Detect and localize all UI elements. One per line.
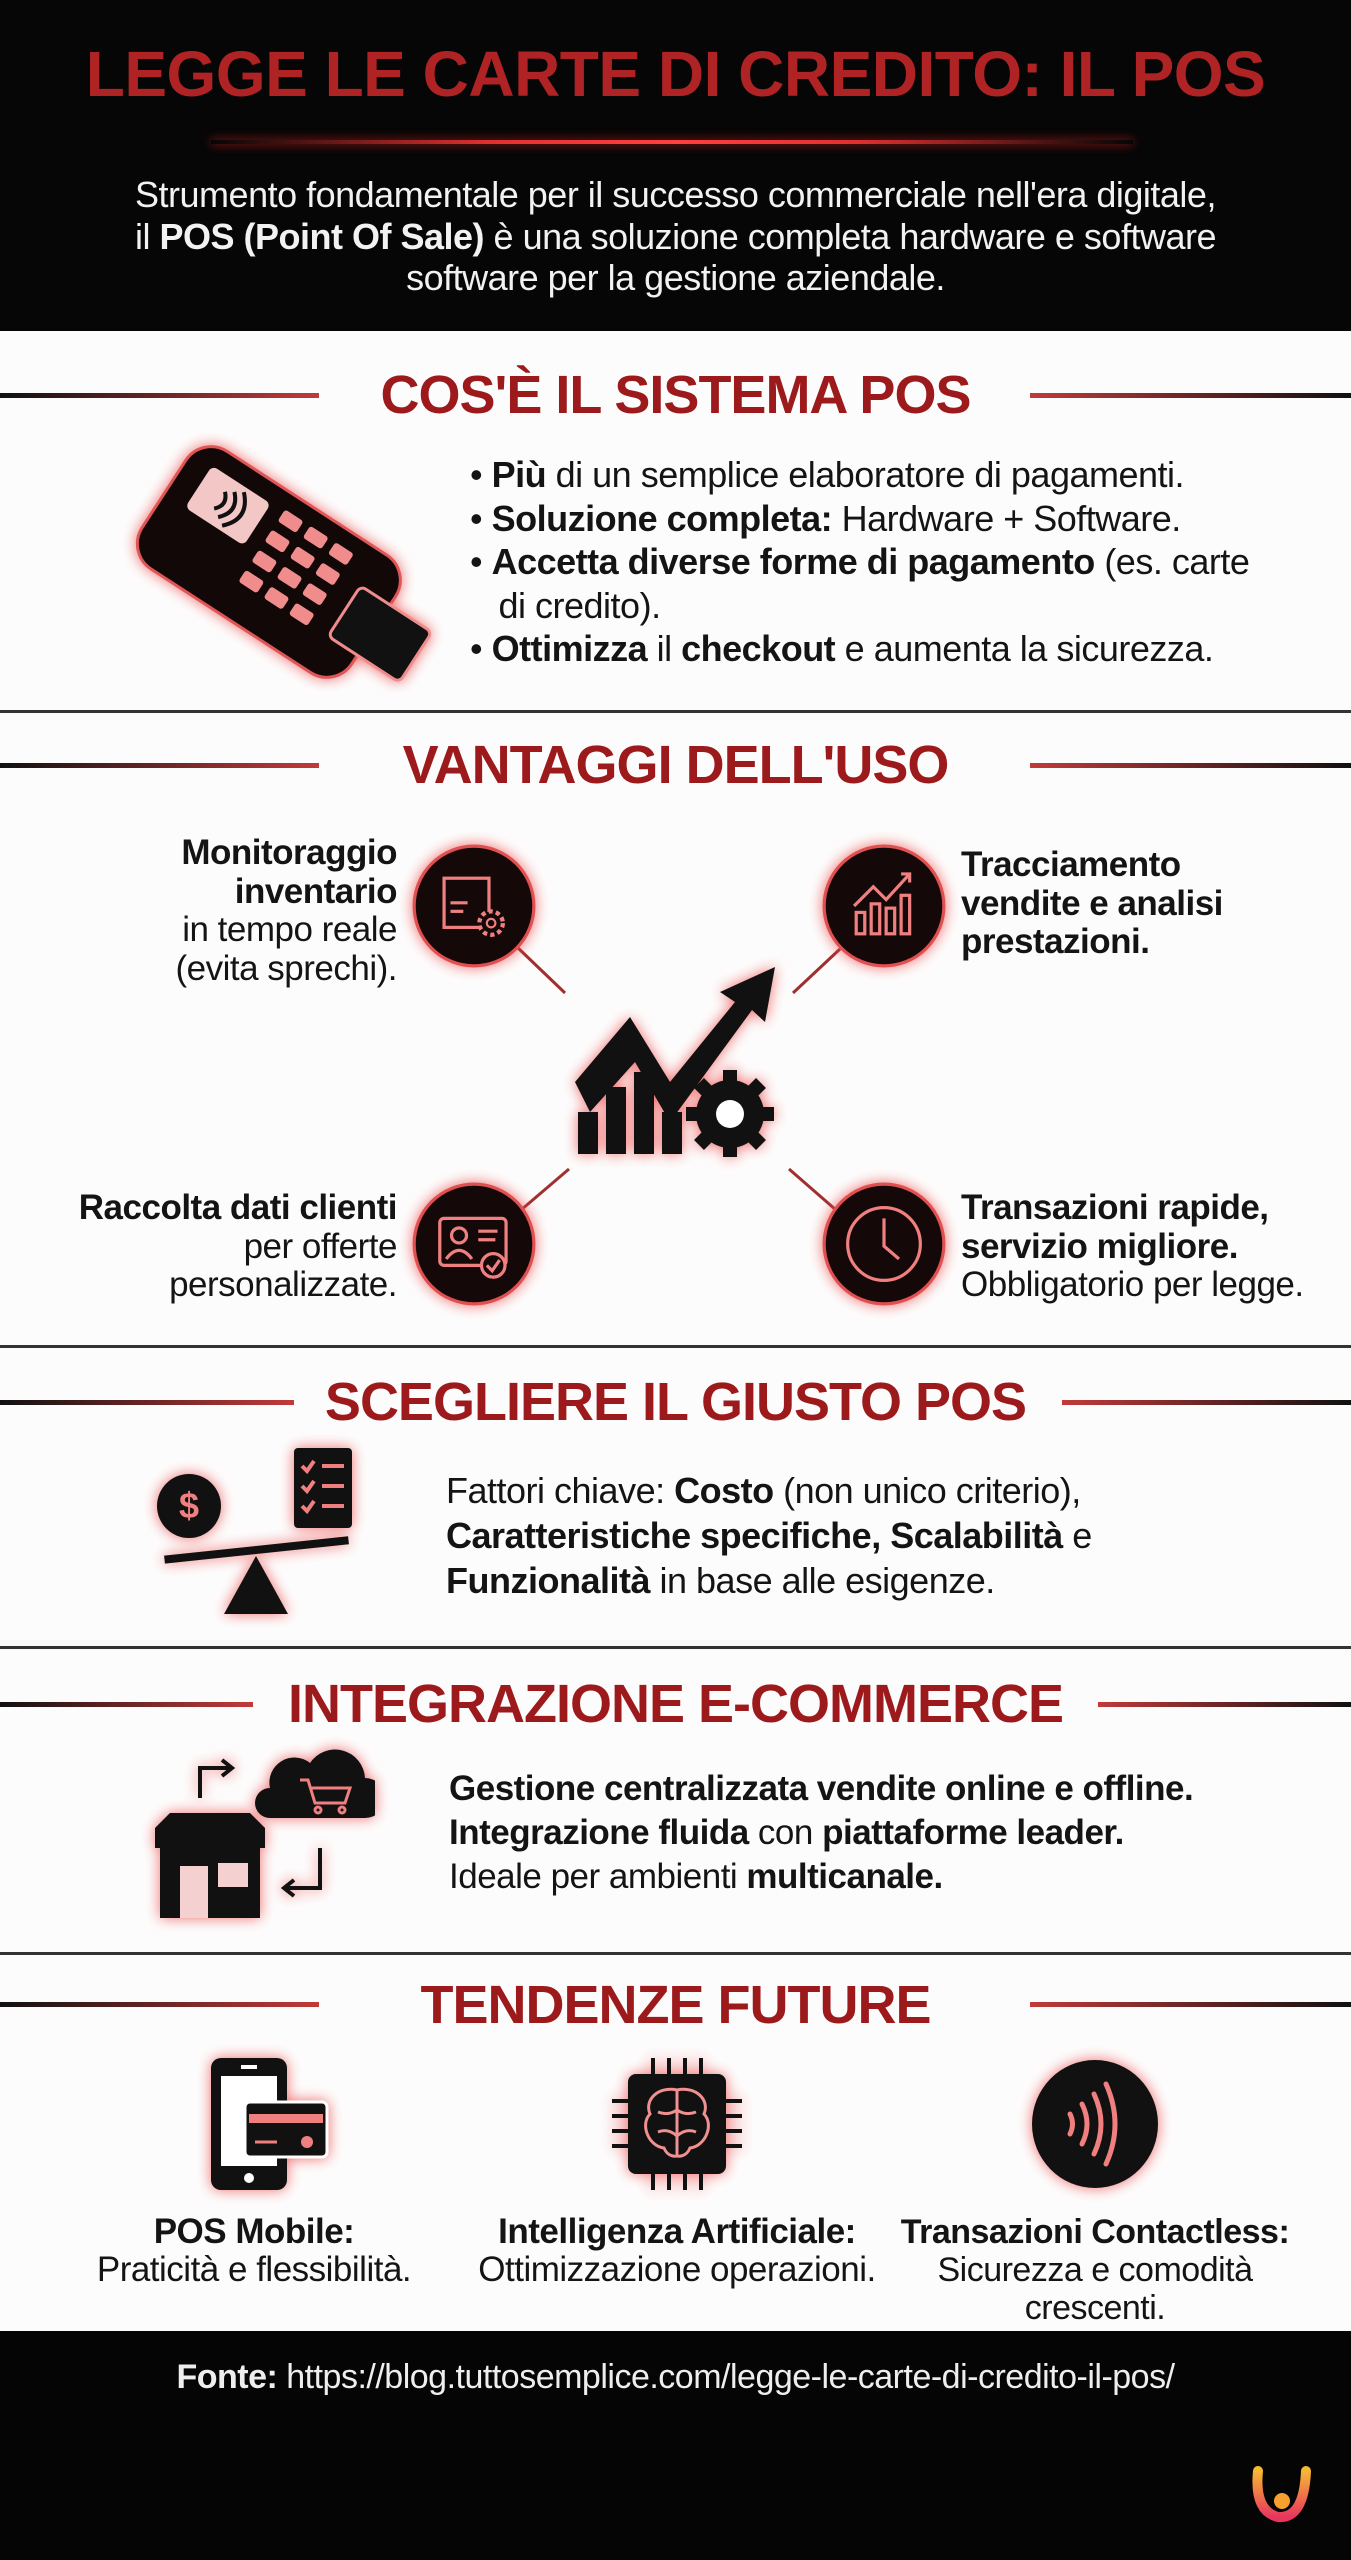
- label: transazioni contactless: Transazioni Contactless:: [901, 2213, 1289, 2251]
- text: ecommerce integration: [449, 1769, 1193, 1896]
- icon: balance scale: [148, 1438, 362, 1624]
- text: monitoraggio inventario: in tempo reale: [182, 910, 397, 949]
- text: transazioni rapide: Transazioni rapide,: [961, 1188, 1269, 1227]
- label: pos mobile: Praticità e flessibilità.: [97, 2250, 411, 2289]
- bullet list: pos definition: [470, 454, 1249, 669]
- text: ecommerce integration: Ideale per ambienti multicanale.: [449, 1857, 943, 1896]
- text: tracciamento vendite: vendite e analisi: [961, 884, 1223, 923]
- section heading: tendenze future: TENDENZE FUTURE: [420, 1975, 930, 2035]
- text: transazioni rapide: servizio migliore.: [961, 1227, 1238, 1266]
- logo: [1252, 2466, 1311, 2522]
- text: raccolta dati clienti: personalizzate.: [169, 1265, 397, 1304]
- icon: POS terminal: [126, 436, 440, 690]
- label: transazioni contactless: Sicurezza e comodità: [937, 2251, 1253, 2289]
- subtitle: il POS (Point Of Sale) è una soluzione completa hardware e software: [135, 216, 1216, 256]
- source text: Fonte: https://blog.tuttosemplice.com/legge-le-carte-di-credito-il-pos/: [176, 2358, 1175, 2396]
- bullet list: pos definition: • Più di un semplice elaboratore di pagamenti.: [470, 454, 1184, 495]
- text: transazioni rapide: [961, 1188, 1304, 1304]
- text: monitoraggio inventario: (evita sprechi).: [175, 949, 397, 988]
- text: monitoraggio inventario: Monitoraggio: [181, 833, 397, 872]
- icon: central growth chart with gear: [568, 961, 783, 1166]
- icon: AI chip: [607, 2053, 747, 2195]
- text: tracciamento vendite: [961, 845, 1223, 961]
- label: intelligenza artificiale: [478, 2212, 876, 2289]
- header panel: [0, 0, 1351, 331]
- bullet list: pos definition: • Soluzione completa: Hardware + Software.: [470, 498, 1181, 539]
- trend: contactless: [901, 2050, 1289, 2327]
- connector lines: [518, 947, 841, 1210]
- icon: inventory circle: [402, 834, 546, 978]
- text: tracciamento vendite: prestazioni.: [961, 922, 1149, 961]
- label: transazioni contactless: [901, 2213, 1289, 2327]
- subtitle: software per la gestione aziendale.: [406, 257, 945, 298]
- section heading: scegliere il giusto pos: SCEGLIERE IL GIUSTO POS: [325, 1372, 1026, 1432]
- text: raccolta dati clienti: Raccolta dati clienti: [79, 1188, 397, 1227]
- section heading: vantaggi: VANTAGGI DELL'USO: [403, 735, 948, 795]
- label: pos mobile: POS Mobile:: [154, 2212, 354, 2251]
- text: fattori chiave: Caratteristiche specifiche, Scalabilità e: [446, 1515, 1092, 1556]
- subtitle: [135, 174, 1216, 298]
- section heading: cos'è il sistema pos: COS'È IL SISTEMA POS: [381, 365, 970, 425]
- icon: customer data circle: [402, 1172, 546, 1316]
- icon: store and cloud cart: [145, 1740, 386, 1928]
- label: pos mobile: [97, 2212, 411, 2289]
- icon: sales chart circle: [812, 834, 956, 978]
- icon: mobile phone with card: [200, 2048, 339, 2200]
- trend: pos mobile: [97, 2048, 411, 2289]
- text: ecommerce integration: Gestione centralizzata vendite online e offline.: [449, 1769, 1193, 1808]
- text: tracciamento vendite: Tracciamento: [961, 845, 1181, 884]
- bullet list: pos definition: • Ottimizza il checkout e aumenta la sicurezza.: [470, 628, 1213, 669]
- text: transazioni rapide: Obbligatorio per legge.: [961, 1265, 1304, 1304]
- text: monitoraggio inventario: [175, 833, 397, 988]
- text: fattori chiave: [446, 1470, 1092, 1601]
- text: ecommerce integration: Integrazione fluida con piattaforme leader.: [449, 1813, 1124, 1852]
- text: fattori chiave: Funzionalità in base alle esigenze.: [446, 1560, 995, 1601]
- title underline glow: [211, 140, 1133, 144]
- text: fattori chiave: Fattori chiave: Costo (non unico criterio),: [446, 1470, 1081, 1511]
- icon: contactless circle: [1022, 2050, 1168, 2198]
- text: monitoraggio inventario: inventario: [235, 872, 397, 911]
- label: transazioni contactless: crescenti.: [1025, 2289, 1165, 2327]
- label: intelligenza artificiale: Intelligenza Artificiale:: [498, 2212, 856, 2251]
- section heading: integrazione e-commerce: INTEGRAZIONE E-COMMERCE: [288, 1674, 1063, 1734]
- icon: balance scale: $: [179, 1485, 199, 1526]
- text: raccolta dati clienti: [79, 1188, 397, 1304]
- bullet list: pos definition: di credito).: [498, 585, 661, 626]
- subtitle: Strumento fondamentale per il successo commerciale nell'era digitale,: [135, 174, 1216, 215]
- trend: intelligenza artificiale: [478, 2053, 876, 2289]
- footer panel: [0, 2331, 1351, 2560]
- bullet list: pos definition: • Accetta diverse forme di pagamento (es. carte: [470, 541, 1249, 582]
- benefits diagram: [79, 833, 1304, 1316]
- label: intelligenza artificiale: Ottimizzazione operazioni.: [478, 2250, 876, 2289]
- text: raccolta dati clienti: per offerte: [244, 1227, 397, 1266]
- title: LEGGE LE CARTE DI CREDITO: IL POS: [86, 38, 1265, 110]
- icon: clock circle: [812, 1172, 956, 1316]
